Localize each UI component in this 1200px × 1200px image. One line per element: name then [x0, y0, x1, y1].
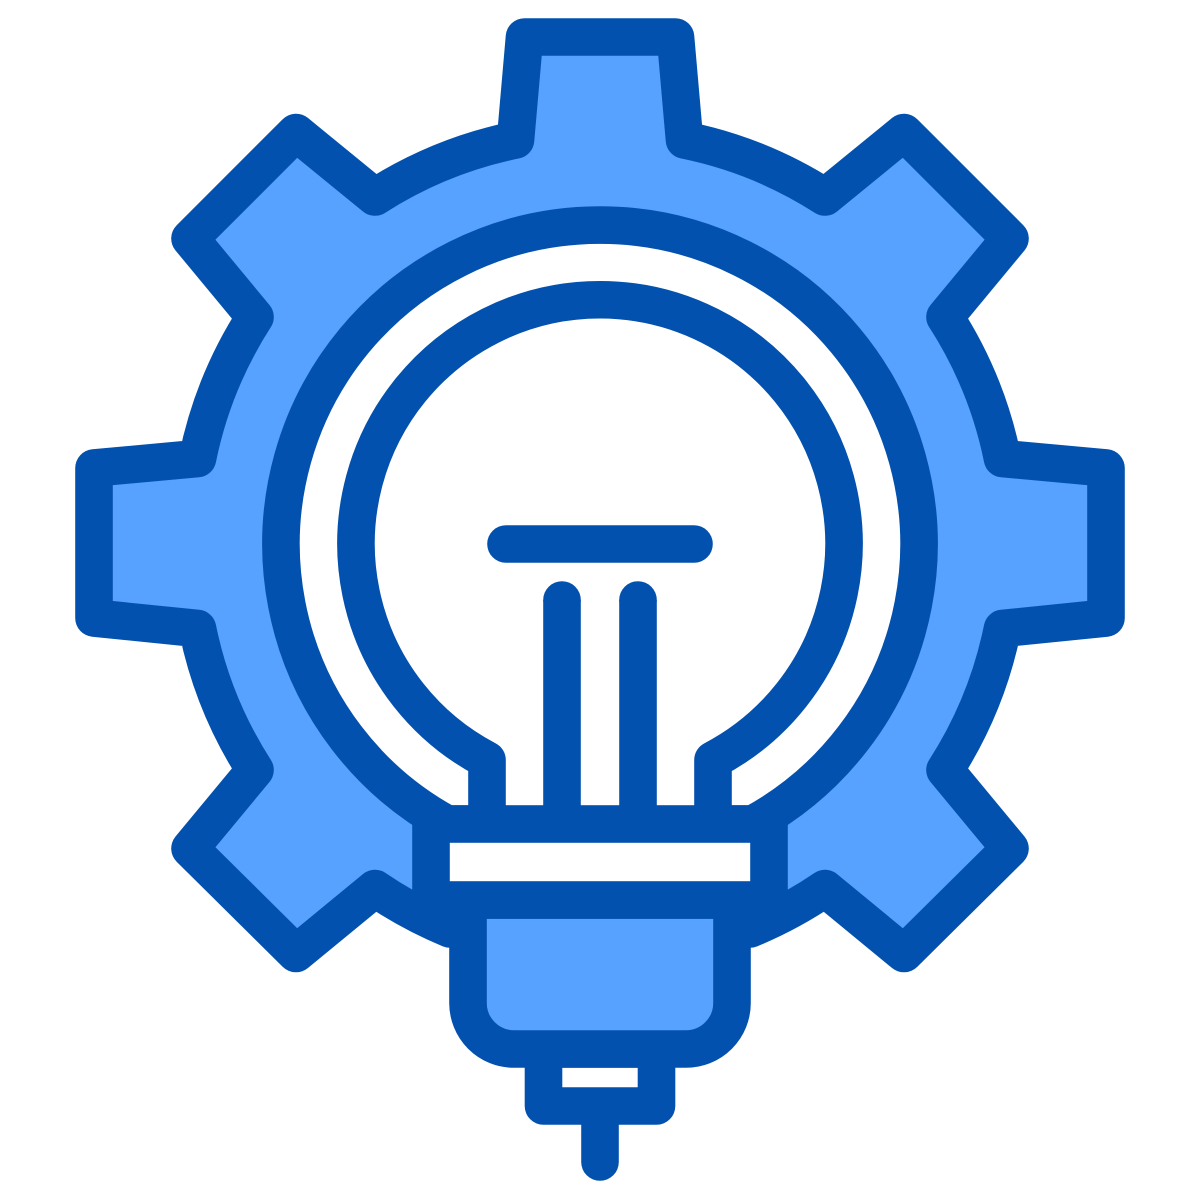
bulb base socket	[468, 900, 732, 1049]
bulb contact stem	[581, 1106, 619, 1162]
filament right post	[619, 600, 657, 824]
bulb contact block	[544, 1049, 656, 1106]
outer white ring around bulb	[281, 225, 919, 824]
bulb collar	[431, 824, 769, 900]
bulb glass outline	[356, 300, 844, 824]
filament left post	[543, 600, 581, 824]
gear body	[94, 37, 1106, 954]
filament crossbar	[506, 525, 694, 563]
filament post caps	[543, 581, 657, 619]
